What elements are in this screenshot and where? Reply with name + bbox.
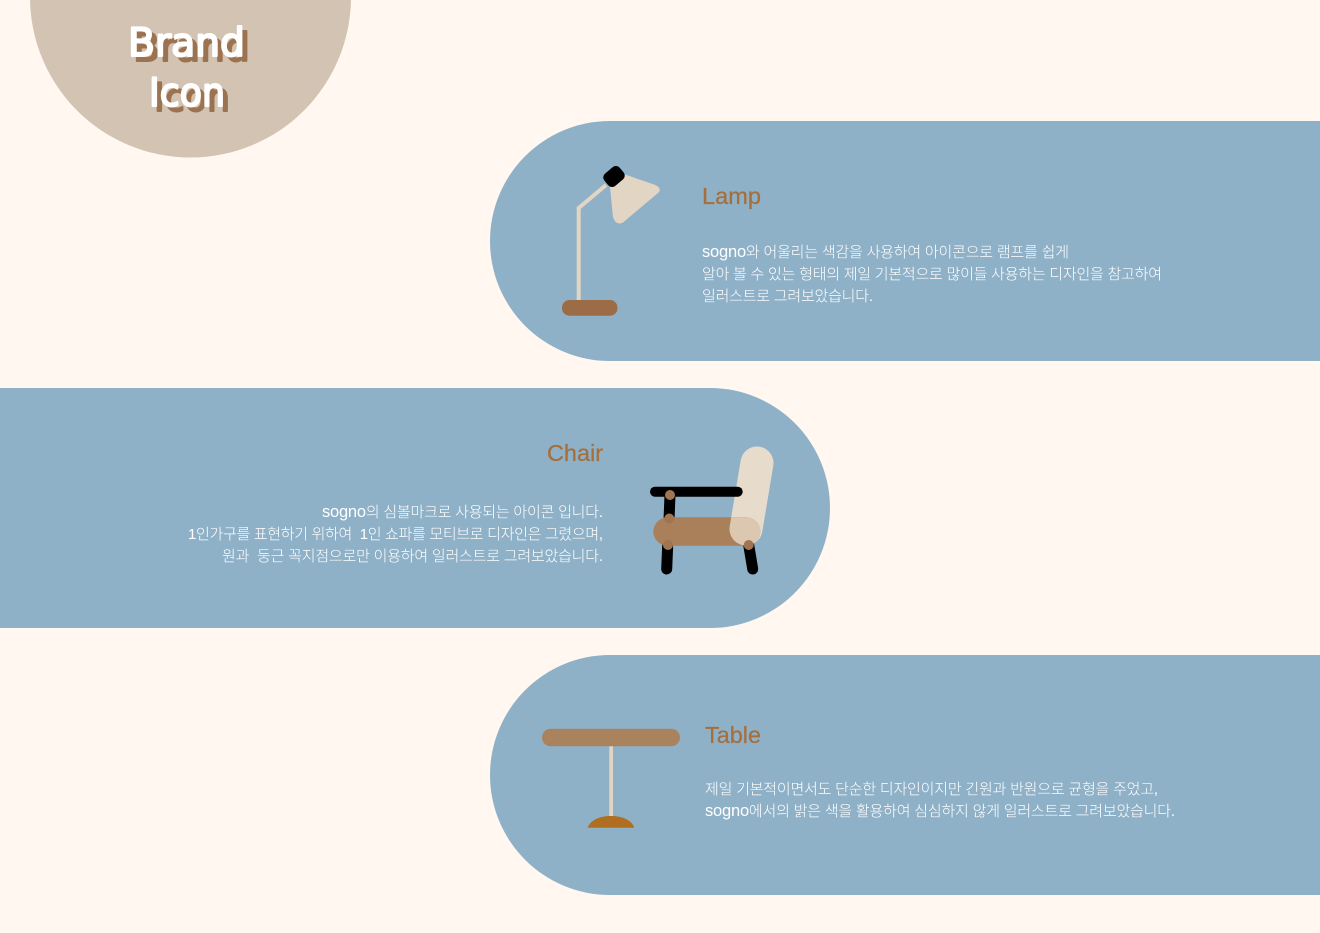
heading: Chair: Chair bbox=[547, 440, 603, 466]
title: Brand Icon bbox=[128, 21, 250, 121]
text block: lamp description: 일러스트로 그려보았습니다. bbox=[702, 288, 873, 305]
text block: chair description bbox=[188, 503, 603, 565]
title: Brand Icon: Brand bbox=[133, 26, 250, 71]
text block: lamp description: 알아 볼 수 있는 형태의 제일 기본적으로 많이들 사용하는 디자인을 참고하여 bbox=[702, 266, 1162, 283]
text block: chair description: 1인가구를 표현하기 위하여 1인 쇼파를 모티브로 디자인은 그렸으며, bbox=[188, 526, 603, 543]
title: Brand Icon: Icon bbox=[149, 71, 225, 116]
title: Brand Icon: Brand bbox=[128, 21, 245, 66]
heading: Lamp: Lamp bbox=[702, 183, 761, 209]
panel: table bbox=[490, 655, 1320, 895]
text block: chair description: 원과 둥근 꼭지점으로만 이용하여 일러스트로 그려보았습니다. bbox=[222, 548, 603, 565]
text block: table description bbox=[705, 781, 1175, 820]
heading: Table: Table bbox=[705, 722, 761, 748]
panel: lamp bbox=[490, 121, 1320, 361]
text block: table description: sogno에서의 밝은 색을 활용하여 심심하지 않게 일러스트로 그려보았습니다. bbox=[705, 802, 1175, 820]
text block: chair description: sogno의 심볼마크로 사용되는 아이콘 입니다. bbox=[322, 503, 603, 521]
icon: lamp bbox=[562, 164, 660, 316]
icon: chair bbox=[653, 463, 760, 569]
title: Brand Icon: Icon bbox=[154, 76, 230, 121]
panel: chair bbox=[0, 388, 830, 628]
text block: lamp description: sogno와 어울리는 색감을 사용하여 아이콘으로 램프를 쉽게 bbox=[702, 243, 1069, 261]
title badge bbox=[30, 0, 351, 158]
text block: table description: 제일 기본적이면서도 단순한 디자인이지만 긴원과 반원으로 균형을 주었고, bbox=[705, 781, 1158, 798]
icon: table bbox=[542, 729, 680, 828]
text block: lamp description bbox=[702, 243, 1162, 305]
